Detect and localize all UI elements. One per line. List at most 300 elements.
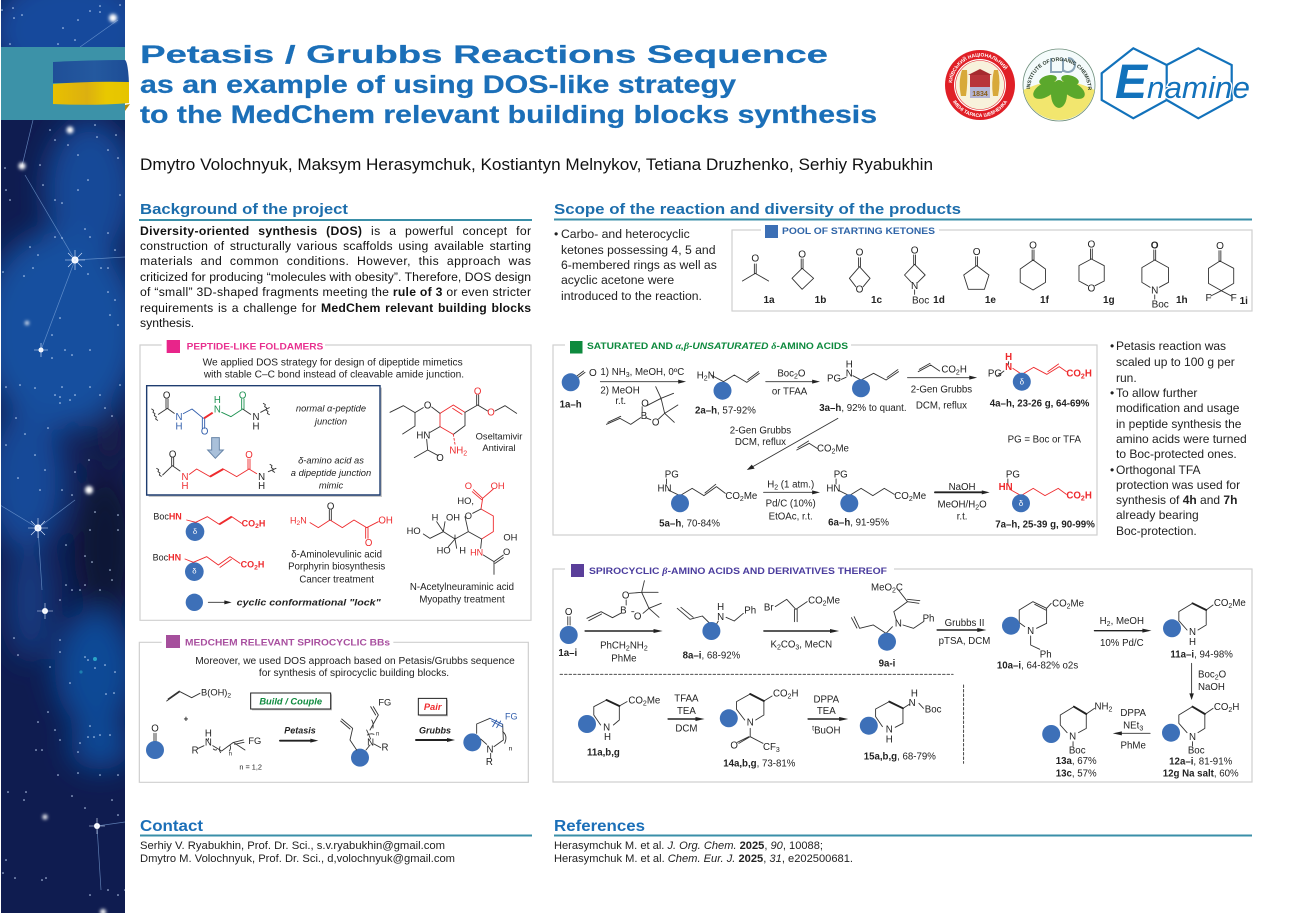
labels and reagents: CO: [1066, 369, 1081, 380]
molecule: unsaturated delta amino acid: [153, 553, 264, 581]
labels and reagents: 15a,b,g, 68-79%: [864, 751, 936, 762]
labels and reagents: H: [886, 735, 893, 746]
text block: right bullets: Orthogonal TFA: [1116, 463, 1200, 477]
molecule: aminolevulinic acid: O: [365, 538, 373, 549]
reagent: allyl boronic acid: +: [184, 715, 189, 724]
logo: university seal: ІМЕНІ ТАРАСА ШЕВЧЕНКА: [952, 100, 1008, 117]
molecule: aminolevulinic acid: Porphyrin biosynthesis: [288, 562, 385, 573]
panel: pool of starting ketones: 1a: [763, 295, 775, 306]
molecule: unsaturated delta amino acid: H: [258, 560, 264, 570]
labels and reagents: 3: [1139, 725, 1143, 732]
heading: scope: Scope of the reaction and diversity of the products: [554, 201, 961, 218]
labels and reagents: PG: [665, 470, 679, 481]
labels and reagents: H: [1189, 637, 1196, 648]
labels and reagents: 2: [1107, 621, 1111, 628]
callout: peptide junction box: δ-amino acid as: [298, 455, 364, 465]
labels and reagents: or TFAA: [772, 386, 808, 397]
labels and reagents: 13a, 67%: [1056, 756, 1097, 767]
panel: pool of starting ketones: O: [973, 247, 981, 258]
callout: peptide junction box: [147, 386, 382, 497]
reagent: allyl boronic acid: B(OH): [201, 688, 227, 698]
logo: university seal: КИЇВСЬКИЙ НАЦІОНАЛЬНИЙ: [948, 53, 1008, 83]
molecule: unsaturated delta amino acid: δ: [192, 567, 196, 576]
labels and reagents: N: [886, 725, 893, 736]
labels and reagents: N: [895, 619, 902, 630]
text block: scope bullet: [554, 227, 717, 303]
labels and reagents: Me: [913, 491, 926, 502]
labels and reagents: NEt: [1123, 720, 1139, 731]
callout: peptide junction box: H: [258, 481, 265, 492]
labels and reagents: t: [812, 725, 814, 732]
labels and reagents: PhMe: [1121, 740, 1146, 751]
labels and reagents: 2: [1081, 374, 1085, 381]
callout: peptide junction box: O: [163, 390, 171, 401]
text block: right bullets: Boc-protection.: [1116, 524, 1197, 538]
molecule: N-acetylneuraminic acid: HO: [407, 526, 421, 536]
labels and reagents: Me: [647, 695, 660, 706]
panel: pool of starting ketones: O: [856, 248, 864, 259]
labels and reagents: HN: [658, 484, 672, 495]
labels and reagents: PhCH: [600, 640, 626, 651]
labels and reagents: N: [747, 718, 754, 729]
labels and reagents: 6a–h, 91-95%: [828, 518, 889, 529]
text block: contact: Dmytro M. Volochnyuk, Prof. Dr. Sci., d,volochnyuk@gmail.com: [140, 853, 455, 865]
ketone structures: [742, 249, 1234, 299]
molecule: N-acetylneuraminic acid: OH: [503, 533, 517, 543]
molecule: oseltamivir: Oseltamivir: [476, 431, 522, 441]
text block: right bullets: To allow further: [1116, 386, 1197, 400]
labels and reagents: PG: [827, 374, 841, 385]
authors: Dmytro Volochnyuk, Maksym Herasymchuk, Kostiantyn Melnykov, Tetiana Druzhenko, Serhiy Ryabukhin: [140, 156, 933, 174]
labels and reagents: CO: [1214, 598, 1228, 609]
labels and reagents: EtOAc, r.t.: [769, 512, 813, 523]
text block: right bullets: •: [1110, 386, 1114, 400]
panel: amino acids synthesis scheme: [553, 340, 1097, 535]
labels and reagents: 2-Gen Grubbs: [730, 426, 791, 437]
labels and reagents: C: [896, 583, 903, 594]
legend: conformational lock: cyclic conformational "lock": [237, 597, 382, 607]
labels and reagents: 2: [1228, 707, 1232, 714]
labels and reagents: CF: [763, 742, 776, 753]
labels and reagents: , MeOH, 0ºC: [630, 367, 684, 378]
labels and reagents: H: [1085, 369, 1092, 380]
substituent circles: δ: [1019, 499, 1024, 508]
labels and reagents: H: [604, 732, 611, 743]
callout: peptide junction box: N: [258, 472, 265, 483]
molecule: N-acetylneuraminic acid: Myopathy treatment: [419, 594, 505, 605]
text block: contact: Serhiy V. Ryabukhin, Prof. Dr. Sci., s.v.ryabukhin@gmail.com: [140, 840, 445, 852]
small stars: [2, 5, 125, 895]
labels and reagents: 2: [1108, 706, 1112, 713]
labels and reagents: HN: [999, 482, 1013, 493]
panel: pool of starting ketones: O: [1151, 240, 1159, 251]
labels and reagents: 4a–h, 23-26 g, 64-69%: [990, 399, 1090, 410]
logo: university seal: [945, 50, 1015, 120]
callout: peptide junction box: O: [239, 390, 247, 401]
labels and reagents: NH: [630, 640, 644, 651]
molecule: unsaturated delta amino acid: 2: [254, 564, 258, 571]
labels and reagents: 2: [832, 449, 836, 456]
labels and reagents: 3: [626, 372, 630, 379]
callout: peptide junction box: junction: [313, 416, 347, 426]
panel: medchem relevant spirocyclic building blocks: [139, 635, 528, 782]
molecule: petasis product: R: [382, 743, 389, 754]
molecule: N-acetylneuraminic acid: HO: [437, 545, 451, 555]
labels and reagents: CO: [941, 364, 956, 375]
text block: background: materials and common conditions. However, this approach was: [140, 254, 531, 268]
text block: right bullets: already bearing: [1116, 508, 1199, 522]
panel: pool of starting ketones: F: [1205, 293, 1212, 304]
molecule: oseltamivir: NH: [449, 445, 463, 456]
panel: medchem relevant spirocyclic building blocks: MEDCHEM RELEVANT SPIROCYCLIC BBs: [185, 638, 390, 648]
title: to the MedChem relevant building blocks synthesis: [140, 101, 877, 129]
callout: peptide junction box: normal α-peptide: [296, 404, 366, 414]
text block: right bullets: protection was used for: [1116, 478, 1240, 492]
panel: pool of starting ketones: 1c: [871, 295, 882, 306]
arrow: grubbs: [416, 726, 455, 742]
molecule: aminolevulinic acid: N: [300, 515, 307, 525]
labels and reagents: N: [717, 612, 724, 623]
panel: pool of starting ketones: 1i: [1240, 296, 1248, 307]
labels and reagents: HN: [826, 484, 840, 495]
labels and reagents: 2) MeOH: [600, 385, 640, 396]
labels and reagents: Br: [764, 603, 774, 614]
labels and reagents: DCM, reflux: [735, 437, 786, 448]
icon: Ukrainian flag ribbon: [53, 60, 130, 111]
labels and reagents: 2: [1215, 674, 1219, 681]
callout: peptide junction box: O: [201, 427, 209, 438]
molecule: aminolevulinic acid: Cancer treatment: [299, 574, 374, 585]
heading: references: References: [554, 818, 645, 835]
text block: scope bullet: •: [554, 227, 558, 241]
labels and reagents: 5a–h, 70-84%: [659, 518, 720, 529]
substituent circles: δ: [1020, 378, 1025, 386]
reagent: amine: R: [192, 745, 199, 756]
reagent: amine: FG: [248, 736, 261, 746]
labels and reagents: Boc: [777, 369, 794, 380]
callout: peptide junction box: O: [169, 450, 177, 461]
labels and reagents: O: [565, 607, 573, 618]
labels and reagents: H: [1005, 352, 1012, 363]
labels and reagents: 2: [892, 588, 896, 595]
logo: Institute of Organic Chemistry: [1022, 48, 1096, 122]
labels and reagents: H: [791, 689, 798, 700]
callout: peptide junction box: a dipeptide junction: [291, 468, 371, 478]
text block: references: [554, 840, 853, 865]
molecule: oseltamivir: O: [424, 400, 432, 411]
labels and reagents: 11a,b,g: [587, 748, 620, 759]
title: as an example of using DOS-like strategy: [140, 71, 736, 99]
callout: peptide junction box: N: [214, 404, 221, 415]
labels and reagents: (1 atm.): [778, 480, 814, 491]
panel: pool of starting ketones: 1f: [1040, 295, 1050, 306]
molecule: N-acetylneuraminic acid: O: [503, 547, 510, 557]
molecule: N-acetylneuraminic acid: N-Acetylneuraminic acid: [410, 582, 514, 593]
labels and reagents: H: [1085, 490, 1092, 501]
molecule: aminolevulinic acid: O: [327, 501, 335, 512]
reagent: allyl boronic acid: [167, 688, 231, 724]
panel: pool of starting ketones: O: [856, 284, 864, 295]
bonds and arrows: [560, 581, 1213, 763]
labels and reagents: 2a–h, 57-92%: [695, 405, 756, 416]
panel: pool of starting ketones: Boc: [1152, 299, 1169, 310]
labels and reagents: TFAA: [674, 694, 699, 705]
label: pair: Pair: [424, 702, 443, 712]
labels and reagents: CO: [817, 444, 832, 455]
labels and reagents: 2: [788, 694, 792, 701]
molecule: spirocyclic product: n: [509, 746, 513, 753]
molecule: saturated delta amino acid: 2: [255, 523, 259, 530]
callout: peptide junction box: N: [176, 412, 183, 423]
labels and reagents: H: [911, 689, 918, 700]
callout: peptide junction box: H: [214, 395, 221, 406]
labels and reagents: NH: [1094, 701, 1108, 712]
text block: scope bullet: 6-membered rings as well as: [561, 258, 717, 272]
left star-field banner: [1, 0, 125, 913]
callout: peptide junction box: H: [253, 421, 260, 432]
labels and reagents: , MeCN: [799, 639, 832, 650]
labels and reagents: O: [1219, 669, 1227, 680]
molecule: N-acetylneuraminic acid: HN: [470, 548, 483, 558]
molecule: N-acetylneuraminic acid: O: [465, 511, 472, 521]
molecule: oseltamivir: Antiviral: [482, 443, 516, 453]
callout: peptide junction box: H: [182, 481, 189, 492]
molecule: saturated delta amino acid: [153, 511, 265, 541]
labels and reagents: O: [641, 399, 649, 410]
labels and reagents: Ph: [923, 614, 934, 625]
panel: pool of starting ketones: O: [911, 245, 919, 256]
labels and reagents: B: [641, 411, 647, 422]
labels and reagents: DPPA: [813, 695, 840, 706]
label: build couple: [251, 693, 332, 710]
labels and reagents: 2: [777, 644, 781, 651]
title: Petasis / Grubbs Reactions Sequence: [140, 41, 828, 69]
text block: scope bullet: Carbo- and heterocyclic: [561, 227, 690, 241]
labels and reagents: 12a–i, 81-91%: [1169, 756, 1233, 767]
molecule: spirocyclic product: R: [486, 757, 493, 768]
molecule: oseltamivir: O: [487, 408, 495, 419]
text block: background: synthesis.: [140, 316, 194, 330]
labels and reagents: 2: [909, 496, 913, 503]
labels and reagents: 10% Pd/C: [1100, 638, 1144, 649]
molecule: oseltamivir: HN: [416, 430, 430, 441]
labels and reagents: O: [652, 418, 660, 429]
logo: Enamine: [1102, 48, 1250, 118]
labels and reagents: B: [620, 605, 627, 616]
molecule: petasis product: N: [367, 738, 374, 749]
panel: medchem relevant spirocyclic building blocks: for synthesis of spirocyclic building blocks.: [259, 668, 449, 679]
molecule: N-acetylneuraminic acid: [407, 481, 517, 605]
labels and reagents: 2: [704, 375, 708, 382]
panel: pool of starting ketones: 1g: [1103, 295, 1115, 306]
substituent circles: [560, 617, 1181, 743]
text block: scope bullet: introduced to the reaction.: [561, 289, 702, 303]
labels and reagents: 2: [956, 369, 960, 376]
labels and reagents: 11a–i, 94-98%: [1170, 650, 1233, 661]
molecule: oseltamivir: O: [436, 453, 444, 464]
molecule: unsaturated delta amino acid: CO: [241, 560, 254, 570]
labels and reagents: O: [634, 611, 642, 622]
text block: right bullets: synthesis of 4h and 7h: [1116, 493, 1237, 507]
labels and reagents: 3a–h, 92% to quant.: [819, 403, 907, 414]
label: build couple: Build / Couple: [259, 696, 322, 706]
labels and reagents: 2: [644, 645, 648, 652]
labels and reagents: H: [767, 480, 774, 491]
labels and reagents: Pd/C (10%): [766, 499, 816, 510]
callout: peptide junction box: N: [182, 472, 189, 483]
labels and reagents: CO: [1052, 599, 1067, 610]
labels and reagents: Me: [1071, 599, 1084, 610]
labels and reagents: N: [909, 698, 916, 709]
reagent: amine: n: [229, 752, 232, 758]
labels and reagents: O: [622, 590, 630, 601]
labels and reagents: O: [589, 368, 597, 379]
molecule: petasis product: n: [376, 732, 379, 738]
label: pair: [418, 698, 448, 716]
molecule: saturated delta amino acid: BocHN: [153, 511, 182, 521]
labels and reagents: PG: [988, 369, 1002, 380]
molecule: petasis product: FG: [378, 698, 391, 708]
labels and reagents: NaOH: [949, 482, 976, 493]
labels and reagents: H: [697, 370, 704, 381]
panel: pool of starting ketones: N: [911, 281, 918, 292]
labels and reagents: Grubbs II: [945, 618, 984, 629]
labels and reagents: CO: [894, 491, 909, 502]
molecule: petasis product: [341, 698, 391, 767]
labels and reagents: PG: [1006, 470, 1020, 481]
labels and reagents: CO: [773, 689, 788, 700]
text block: right bullets: amino acids were turned: [1116, 432, 1247, 446]
panel: pool of starting ketones: 1b: [815, 295, 826, 306]
labels and reagents: 10a–i, 64-82% o2s: [997, 660, 1078, 671]
labels and reagents: DCM: [675, 724, 697, 735]
panel: pool of starting ketones: N: [1151, 285, 1158, 296]
title: [140, 41, 877, 129]
labels and reagents: H: [1100, 616, 1107, 627]
labels and reagents: O: [979, 499, 987, 510]
panel: pool of starting ketones: O: [751, 254, 759, 265]
labels and reagents: CO: [628, 695, 643, 706]
panel: spirocyclic beta amino acids scheme: SPIROCYCLIC β-AMINO ACIDS AND DERIVATIVES THEREOF: [589, 566, 887, 577]
reagent: allyl boronic acid: 2: [227, 693, 231, 700]
molecule: oseltamivir: [390, 386, 522, 464]
labels and reagents: N: [1189, 732, 1196, 743]
panel: pool of starting ketones: Boc: [912, 295, 929, 306]
molecule: spirocyclic product: N: [487, 744, 494, 755]
text block: background: [140, 224, 531, 330]
arrow: grubbs: Grubbs: [419, 726, 451, 736]
labels and reagents: DCM, reflux: [916, 400, 967, 411]
labels and reagents: Me: [744, 491, 757, 502]
labels and reagents: 13c, 57%: [1056, 769, 1097, 780]
labels and reagents: CO: [781, 639, 796, 650]
logo: Enamine: namine: [1147, 70, 1250, 105]
labels and reagents: Boc: [925, 705, 942, 716]
labels and reagents: DPPA: [1120, 708, 1147, 719]
text block: references: Herasymchuk M. et al. Chem. Eur. J. 2025, 31, e202500681.: [554, 853, 853, 865]
text block: right bullets: •: [1110, 339, 1114, 353]
labels and reagents: Boc: [1069, 745, 1086, 756]
text block: background: criticized for producing “molecules with obesity”. Therefore, DOS design: [140, 270, 531, 284]
labels and reagents: Me: [827, 595, 840, 606]
text block: right bullets: Petasis reaction was: [1116, 339, 1226, 353]
text block: right bullets: scaled up to 100 g per: [1116, 355, 1235, 369]
panel: pool of starting ketones: O: [1088, 239, 1096, 250]
labels and reagents: MeO: [871, 583, 892, 594]
labels and reagents: 14a,b,g, 73-81%: [723, 759, 796, 770]
labels and reagents: 2: [774, 485, 778, 492]
molecule: saturated delta amino acid: H: [259, 518, 265, 528]
labels and reagents: Boc: [1198, 669, 1215, 680]
labels and reagents: 7a–h, 25-39 g, 90-99%: [995, 520, 1095, 531]
labels and reagents: O: [730, 740, 738, 751]
panel: spirocyclic beta amino acids scheme: [553, 564, 1252, 782]
labels and reagents: N: [603, 723, 610, 734]
heading: background: Background of the project: [140, 201, 348, 218]
text block: background: requirements is a challenge for MedChem relevant building blocks: [140, 301, 531, 315]
labels and reagents: Me: [1232, 598, 1246, 609]
labels and reagents: H: [717, 602, 724, 613]
labels and reagents: 1) NH: [600, 367, 626, 378]
molecule: N-acetylneuraminic acid: OH: [491, 481, 505, 491]
arrow: petasis: [280, 726, 318, 743]
panel: medchem relevant spirocyclic building blocks: Moreover, we used DOS approach based on Petasis/Grubbs sequence: [195, 656, 515, 667]
labels and reagents: 2: [1067, 604, 1071, 611]
labels and reagents: N: [1189, 627, 1196, 638]
legend: conformational lock: [186, 594, 382, 611]
labels and reagents: H: [846, 359, 853, 370]
labels and reagents: 2: [626, 645, 630, 652]
text block: contact: [140, 840, 455, 865]
labels and reagents: N: [1027, 626, 1034, 637]
labels and reagents: PG: [834, 470, 848, 481]
labels and reagents: O: [798, 369, 806, 380]
panel: pool of starting ketones: 1e: [985, 295, 996, 306]
icon: block down arrow: [208, 438, 223, 458]
labels and reagents: 3: [776, 747, 780, 754]
labels and reagents: Ph: [1040, 649, 1052, 660]
panel: peptide-like foldamers: with stable C–C bond instead of cleavable amide junction.: [203, 370, 464, 381]
molecule: N-acetylneuraminic acid: H: [432, 513, 438, 523]
arrow: petasis: Petasis: [284, 726, 316, 736]
labels and reagents: Me: [835, 444, 849, 455]
labels and reagents: CO: [808, 595, 823, 606]
callout: peptide junction box: mimic: [319, 480, 344, 490]
labels and reagents: PG = Boc or TFA: [1008, 434, 1081, 445]
labels and reagents: CO: [1066, 490, 1081, 501]
text block: background: construction of structurally various scaffolds using available starting: [140, 239, 531, 253]
panel: pool of starting ketones: 1d: [933, 295, 945, 306]
labels and reagents: H: [960, 364, 967, 375]
text block: right bullets: •: [1110, 463, 1114, 477]
labels and reagents: N: [708, 370, 715, 381]
panel: pool of starting ketones: [732, 224, 1252, 311]
reagent: amine: [192, 729, 262, 771]
labels and reagents: , MeOH: [1111, 616, 1144, 627]
reagent: ketone: O: [151, 724, 159, 735]
labels and reagents: 2: [794, 374, 798, 381]
labels and reagents: N: [1005, 362, 1012, 373]
labels and reagents: 8a–i, 68-92%: [683, 650, 741, 661]
labels and reagents: 2: [643, 700, 647, 707]
callout: peptide junction box: H: [176, 421, 183, 432]
molecule: aminolevulinic acid: OH: [378, 516, 393, 527]
labels and reagents: 2: [740, 496, 744, 503]
molecule: N-acetylneuraminic acid: OH: [446, 513, 460, 523]
labels and reagents: 1a–i: [558, 648, 577, 659]
text block: background: of “small” 3D-shaped fragments meeting the rule of 3 or even stricter: [140, 285, 531, 299]
text block: right bullets: in peptide synthesis the: [1116, 417, 1242, 431]
